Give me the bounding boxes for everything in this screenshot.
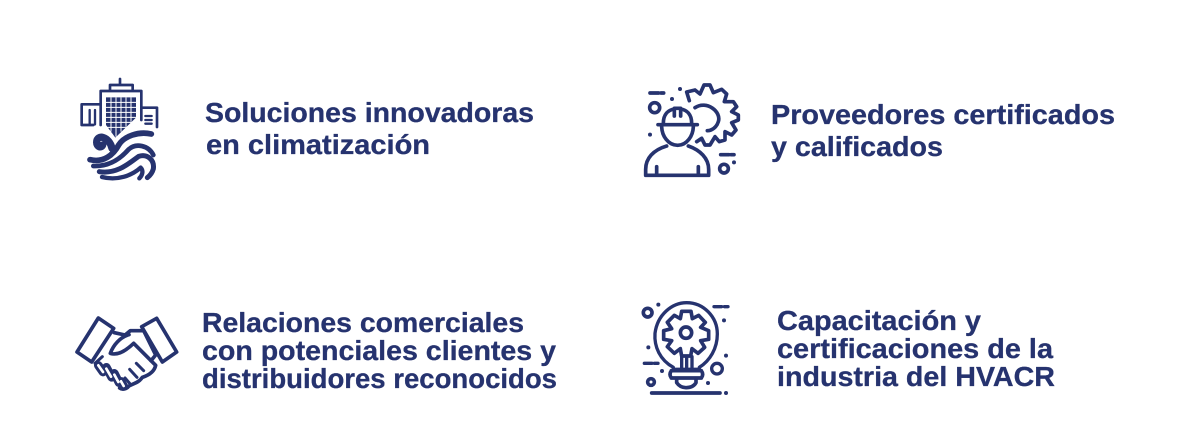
text: Proveedores certificados y calificados: y calificados [771,131,943,162]
text: Relaciones comerciales con potenciales clientes y distribuidores reconocidos: Relaciones comerciales [202,307,524,338]
icon: light bulb with gear [643,303,728,395]
text: Relaciones comerciales con potenciales clientes y distribuidores reconocidos: con potenciales clientes y [202,335,557,366]
text: Soluciones innovadoras en climatización: en climatización [206,129,430,160]
icon: city building with waves [82,79,157,178]
text: Capacitación y certificaciones de la industria del HVACR: industria del HVACR [777,361,1055,392]
text: Proveedores certificados y calificados [771,99,1115,162]
icon: worker with gear [646,85,738,175]
text: Relaciones comerciales con potenciales clientes y distribuidores reconocidos: distribuidores reconocidos [202,363,557,394]
text: Proveedores certificados y calificados: Proveedores certificados [771,99,1115,130]
text: Capacitación y certificaciones de la industria del HVACR: Capacitación y [777,305,982,336]
text: Soluciones innovadoras en climatización: Soluciones innovadoras [205,97,534,128]
finger loops [98,365,124,386]
text: Relaciones comerciales con potenciales clientes y distribuidores reconocidos [202,307,557,394]
text: Capacitación y certificaciones de la industria del HVACR [777,305,1055,392]
text: Soluciones innovadoras en climatización [205,97,534,160]
icon: handshake [77,318,177,389]
text: Capacitación y certificaciones de la industria del HVACR: certificaciones de la [777,333,1054,364]
